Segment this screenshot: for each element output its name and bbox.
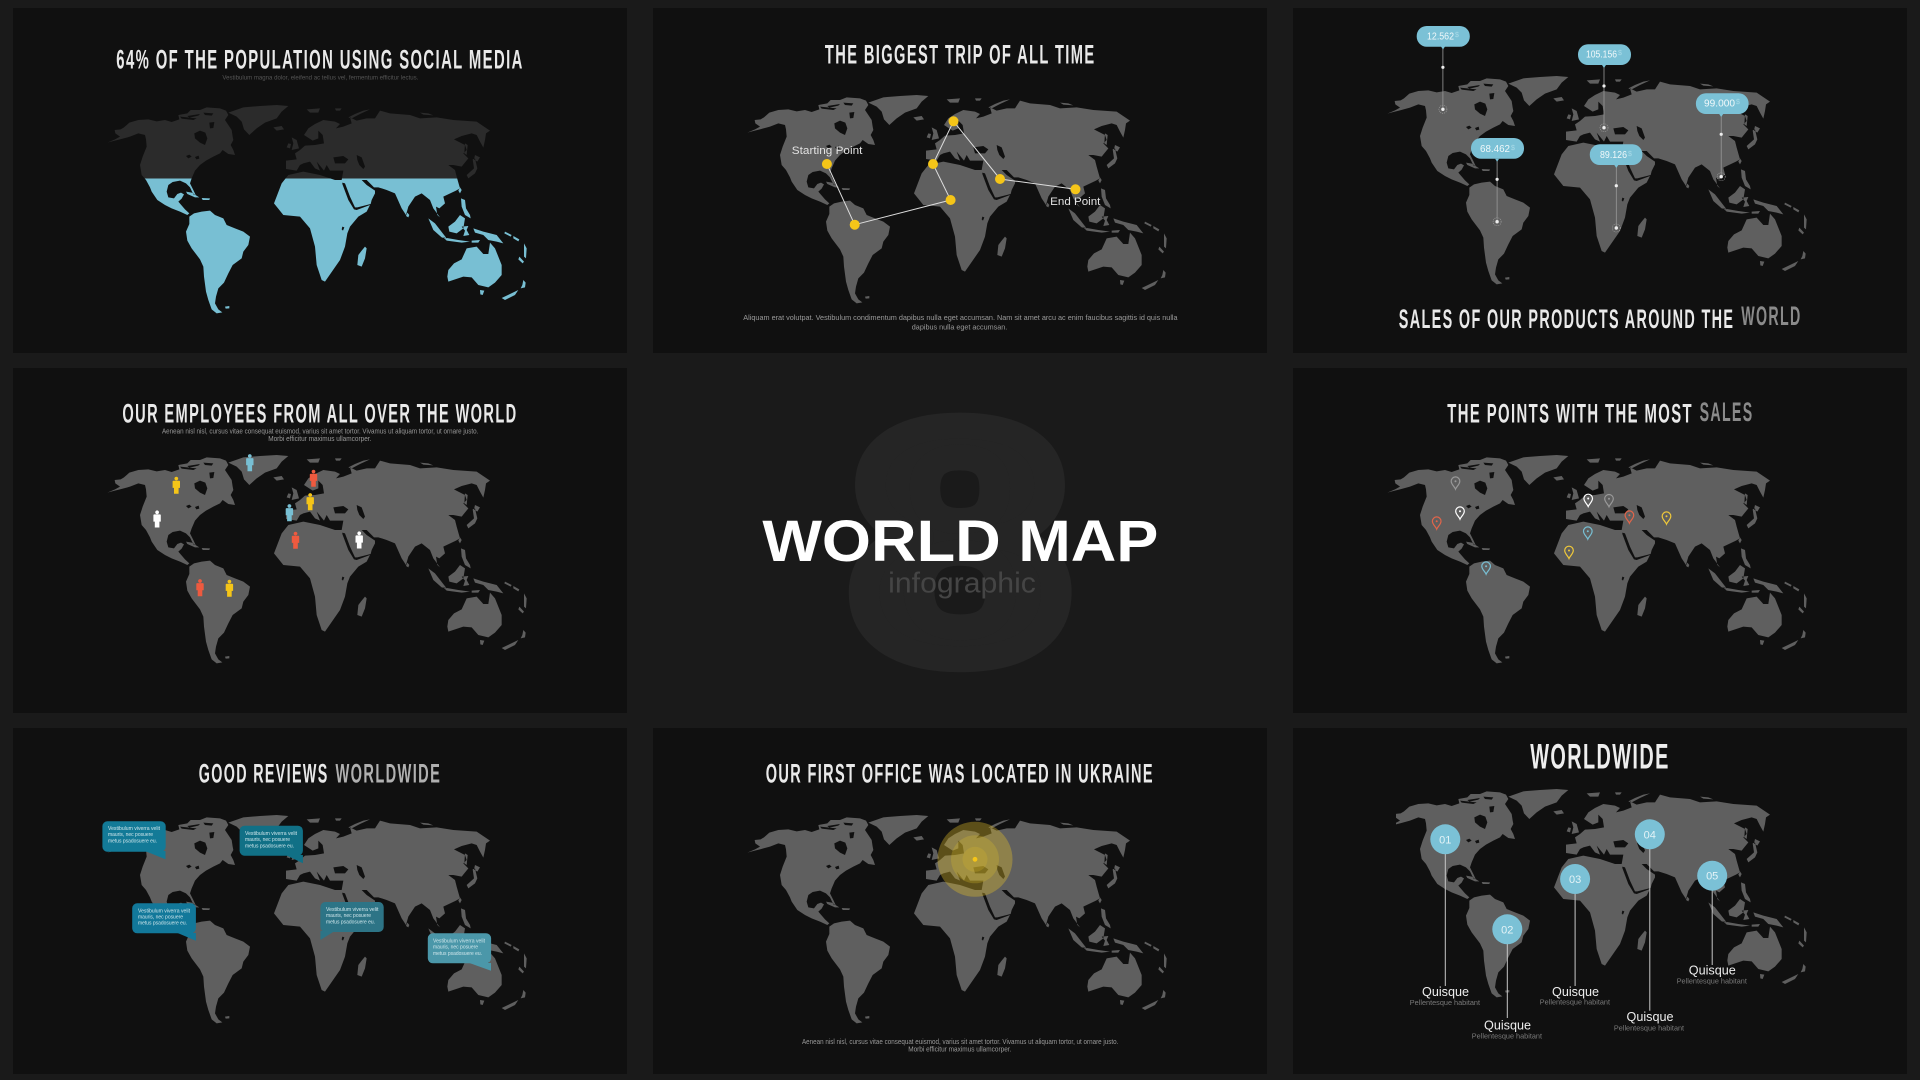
- description: [162, 426, 478, 443]
- speech bubble 3: mauris, nec posuere: [138, 914, 183, 920]
- marker 03: Pellentesque habitant: [1540, 998, 1611, 1006]
- callout: 89.126: $: [1628, 151, 1632, 158]
- title: WORLDWIDE: [1530, 737, 1670, 776]
- title: THE POINTS WITH THE MOST: [1447, 399, 1693, 429]
- world map: upper dark part: [108, 105, 490, 178]
- callout: 99.000: 99.000: [1704, 98, 1735, 110]
- speech bubble 2: mauris, nec posuere: [245, 837, 290, 843]
- callout: 68.462: $: [1511, 145, 1515, 152]
- marker 02: Quisque: [1484, 1018, 1531, 1032]
- panel: center title: [762, 358, 1158, 726]
- speech bubble 1: [102, 821, 166, 859]
- callout: 89.126: 89.126: [1600, 150, 1627, 161]
- speech bubble 5: [428, 933, 491, 971]
- route line: [827, 121, 1076, 225]
- marker 04: Quisque: [1626, 1010, 1674, 1024]
- description: [743, 313, 1178, 331]
- callout: 12.562: 12.562: [1427, 32, 1454, 42]
- speech bubble 3: Vestibulum viverra velit: [138, 908, 191, 914]
- speech bubble 2: metus psadosuere eu.: [245, 843, 294, 849]
- callout: 99.000: $: [1736, 99, 1740, 106]
- marker 02: [1472, 914, 1543, 1040]
- panel: first office: [653, 728, 1267, 1074]
- description: dapibus nulla eget accumsan.: [912, 322, 1007, 331]
- world map: [1387, 789, 1807, 997]
- description: Aenean nisl nisl, cursus vitae consequat euismod, varius sit amet tortor. Vivamus ut aliquam tortor, ut ornare justo.: [162, 426, 478, 435]
- marker 03: [1540, 864, 1611, 1006]
- big numeral 8: 8: [852, 358, 1068, 726]
- panel: worldwide: [1293, 728, 1907, 1074]
- subheading: infographic: [888, 568, 1036, 600]
- world map: [1387, 76, 1807, 284]
- panel: sales around the world: [1293, 8, 1907, 353]
- title accent: WORLD: [1741, 301, 1802, 331]
- panel: good reviews: [13, 728, 627, 1074]
- marker 01: [1410, 824, 1481, 1007]
- speech bubble 4: metus psadosuere eu.: [326, 919, 375, 925]
- world map: lower highlighted part: [144, 178, 527, 314]
- speech bubble 3: metus psadosuere eu.: [138, 920, 187, 926]
- marker 03: 03: [1569, 874, 1581, 886]
- title: OUR EMPLOYEES FROM ALL OVER THE WORLD: [122, 399, 518, 429]
- callout: 99.000: [1696, 93, 1749, 181]
- description: Aliquam erat volutpat. Vestibulum condimentum dapibus nulla eget accumsan. Nam sit amet arcu ac enim faucibus sagittis id quis nulla: [743, 313, 1178, 322]
- description: Morbi efficitur maximus ullamcorper.: [908, 1044, 1011, 1053]
- marker 02: 02: [1501, 924, 1513, 936]
- speech bubble 4: [320, 902, 384, 940]
- location pins: [1432, 477, 1671, 574]
- marker 05: 05: [1706, 871, 1718, 883]
- marker 05: [1677, 861, 1748, 986]
- callout: 68.462: [1471, 138, 1524, 226]
- world map: [747, 95, 1167, 303]
- world map: [747, 815, 1167, 1023]
- title: 64% OF THE POPULATION USING SOCIAL MEDIA: [116, 44, 524, 74]
- speech bubble 1: metus psadosuere eu.: [108, 838, 157, 844]
- speech bubble 2: [240, 826, 303, 863]
- marker 02: Pellentesque habitant: [1472, 1031, 1543, 1040]
- title: OUR FIRST OFFICE WAS LOCATED IN UKRAINE: [766, 759, 1154, 789]
- marker 03: Quisque: [1552, 985, 1599, 999]
- world map: [1387, 455, 1807, 663]
- marker 01: Pellentesque habitant: [1410, 998, 1481, 1007]
- callout: 105.156: [1578, 44, 1631, 132]
- label: end point: End Point: [1050, 196, 1100, 208]
- marker 05: Quisque: [1689, 964, 1736, 978]
- route stops: [822, 116, 1080, 230]
- callout: 68.462: 68.462: [1480, 144, 1510, 155]
- callout: 105.156: $: [1618, 50, 1622, 57]
- callout: 12.562: [1417, 26, 1470, 113]
- title accent: SALES: [1700, 397, 1754, 427]
- person icons: [153, 454, 363, 597]
- title: THE BIGGEST TRIP OF ALL TIME: [825, 39, 1096, 69]
- panel: population using social media: [13, 8, 627, 353]
- subtitle: Vestibulum magna dolor, eleifend ac tellus vel, fermentum efficitur lectus.: [222, 74, 419, 82]
- heading: WORLD MAP: [762, 509, 1158, 574]
- location highlight rings: [938, 822, 1012, 897]
- panel: most sales points: [1293, 368, 1907, 713]
- marker 01: Quisque: [1422, 985, 1469, 999]
- speech bubble 4: Vestibulum viverra velit: [326, 907, 379, 913]
- label: starting point: Starting Point: [792, 145, 862, 157]
- speech bubble 5: mauris, nec posuere: [433, 944, 478, 950]
- speech bubble 4: mauris, nec posuere: [326, 913, 371, 919]
- title: GOOD REVIEWS: [199, 759, 329, 789]
- marker 01: 01: [1439, 834, 1451, 846]
- world map: [107, 815, 527, 1023]
- marker 04: [1614, 819, 1685, 1032]
- panel: employees: [13, 368, 627, 713]
- speech bubble 2: Vestibulum viverra velit: [245, 831, 298, 837]
- marker 04: Pellentesque habitant: [1614, 1023, 1685, 1032]
- speech bubble 3: [132, 903, 196, 941]
- speech bubble 5: Vestibulum viverra velit: [433, 938, 486, 944]
- description: Morbi efficitur maximus ullamcorper.: [268, 434, 371, 443]
- callout: 12.562: $: [1455, 32, 1459, 39]
- callout: 89.126: [1590, 144, 1642, 232]
- speech bubble 1: Vestibulum viverra velit: [108, 826, 161, 832]
- description: Aenean nisl nisl, cursus vitae consequat euismod, varius sit amet tortor. Vivamus ut aliquam tortor, ut ornare justo.: [802, 1037, 1118, 1046]
- speech bubble 5: metus psadosuere eu.: [433, 951, 482, 957]
- marker 05: Pellentesque habitant: [1677, 977, 1748, 986]
- description: [802, 1037, 1118, 1053]
- speech bubble 1: mauris, nec posuere: [108, 832, 153, 838]
- panel: biggest trip: [653, 8, 1267, 353]
- marker 04: 04: [1644, 829, 1656, 841]
- title accent: WORLDWIDE: [336, 759, 441, 789]
- callout: 105.156: 105.156: [1586, 50, 1617, 60]
- world map: [107, 455, 527, 663]
